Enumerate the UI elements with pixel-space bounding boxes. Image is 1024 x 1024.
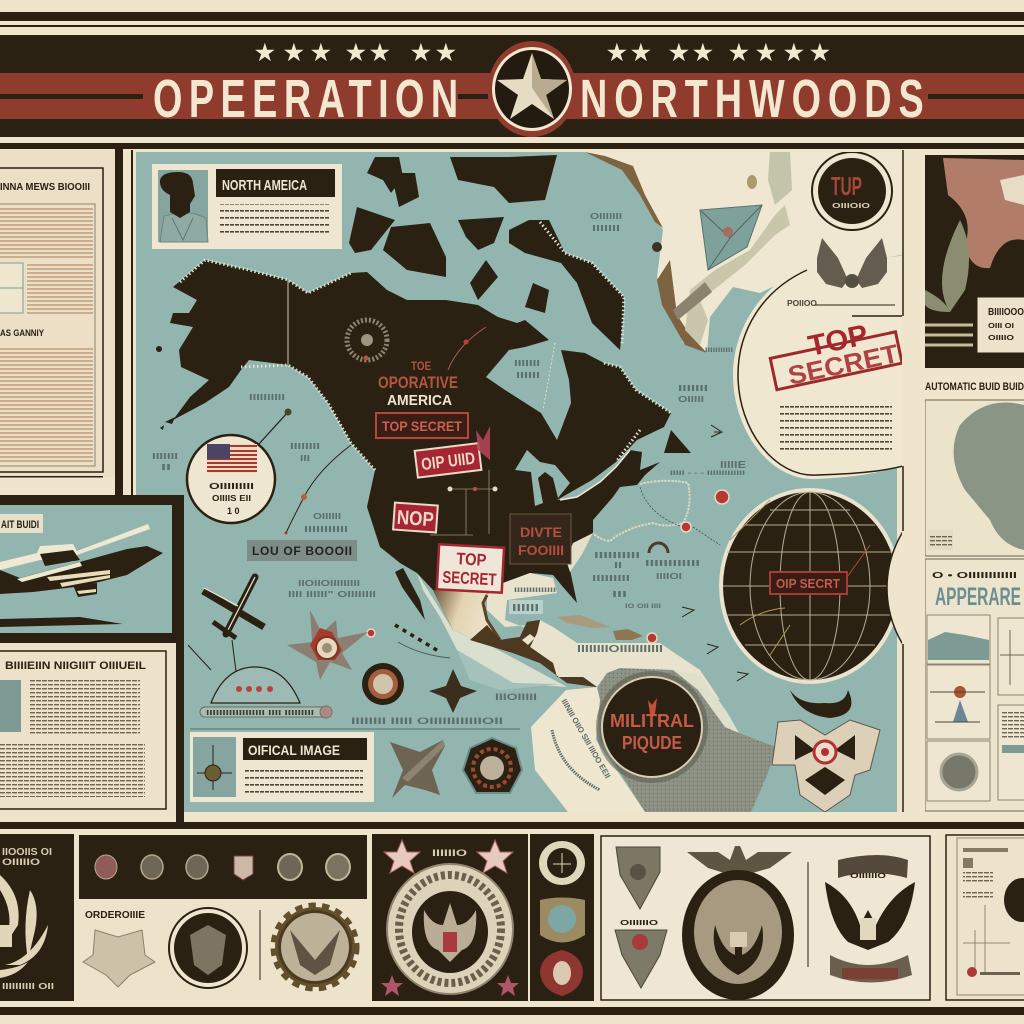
sea labels: OIIIIIII [590,212,622,221]
sea labels: IIIIIII [592,224,620,233]
horizontal rule below main [0,822,1024,829]
cream inset bubble [531,687,645,812]
icon: top seal [812,152,892,230]
panel: plane left [0,495,184,643]
dark right rail [176,495,184,823]
panel: bottom-left dossier: BIIIIEIIN NIIGIIIT OIIIUEIL [5,660,146,672]
stamp c: NOP [396,507,435,531]
top secret stamp a: TOP SECRET [382,418,462,434]
stamp: top secret large: SECRET [785,338,901,391]
sea labels: III [300,454,310,463]
bottom: right document [946,835,1024,1000]
stars row: ★ [669,40,689,65]
gray label: LOU OF BOOOII [252,544,352,558]
caribbean halftone band [530,620,720,700]
sea labels: IIII IIIIII" OIIIIIIII [288,590,376,599]
sea labels: II [161,463,171,472]
shield lower [615,920,667,988]
icon: top seal: TUP [831,171,862,201]
stars row: ★ [411,40,431,65]
small table [0,263,23,313]
sea labels: IIIIIII [514,359,540,368]
stars row: ★ [436,40,456,65]
globe label: OIP SECRT [776,576,840,591]
stars row: ★ [784,40,804,65]
stars row: ★ [756,40,776,65]
sea labels: IIIIIIIIIIII [645,559,700,568]
panel: bottom-left dossier [0,643,176,816]
card: official image [190,732,374,802]
stars row [255,40,830,65]
sea labels: IIIIIIIIII [594,551,640,560]
route line [284,445,351,534]
stars row: ★ [284,40,304,65]
stamp b [415,443,481,478]
panel: map [136,152,902,812]
title word right: NORTHWOODS [580,68,924,129]
appearance panel: O • OIIIIIIIIIIII [932,571,1017,580]
map right rule [902,150,904,812]
hispaniola [613,629,643,640]
red arc [448,327,486,370]
red target markers [367,490,729,643]
bottom: panel great seal [372,834,528,1001]
icon: kite envelope [700,205,762,270]
heading: INNA MEWS BIOOIII [0,182,90,193]
card: official image: OIFICAL IMAGE [248,742,340,758]
stars row: ★ [607,40,627,65]
small map [925,400,1024,556]
coast stipple [180,222,671,470]
sea labels: IIIIIII [152,452,178,461]
panel: right art [925,155,1024,811]
eagle right [825,855,915,982]
info card north america [152,164,342,249]
military plaque: MILITRAL [610,711,694,731]
sea labels: IIIIII [512,603,539,614]
stars row: ★ [255,40,275,65]
stamp dark box: FOOIIII [518,542,564,558]
St Lawrence shore [560,450,630,500]
baja [395,568,425,620]
bottom rule [0,1007,1024,1015]
cuba [557,615,610,628]
sea labels: IIIIIIIIIIIIII [514,588,557,594]
flag callout: OIIIIS EII [212,493,251,503]
shield lower: OIIIIIIO [620,920,659,927]
sea labels: IIIIII [516,371,540,380]
sea labels: IIIIIIIIII [249,393,285,402]
sea labels [152,212,746,726]
sea labels: IIIIIIIIIII [705,348,733,354]
stars row: ★ [729,40,749,65]
stamp: top secret large [766,313,903,394]
stamp: top secret large: TOP [805,319,871,363]
small rainbow icon [649,543,668,553]
panel: left dossier [0,150,115,478]
interior seal [347,320,387,360]
military plaque: PIQUDE [622,733,682,753]
bottom: panel eagles [601,836,930,1000]
flag callout: 1 0 [227,506,240,516]
dome diagram: IIIIIIIIIIIIIIIIII IIII IIIIIIIII [206,710,314,717]
sea labels: IIIIIE [720,460,746,471]
stars row: ★ [346,40,366,65]
dome diagram [188,645,332,718]
eagle right: OIIIIIIO [850,873,887,880]
greenland west coast [585,152,663,228]
sea labels: IIIIIIII [290,442,320,451]
small text rule [787,299,903,316]
sea labels: IIIIOI [656,572,682,581]
caribbean route [593,481,690,541]
panel: right art: OIII OI [988,323,1014,330]
sea labels: IIIIIIIIIII [304,525,348,534]
bubble text: IIINIII OIIO SIII IIIOO EEII [559,698,612,780]
mexico [433,590,500,647]
stars row: ★ [810,40,830,65]
sea labels: IIOIIOIIIIIIIII [298,579,360,588]
dark divider [115,148,123,498]
south america [596,668,776,812]
bottom: panel dark left: OIIIIIO [2,857,40,867]
stars row: ★ [631,40,651,65]
bottom: panel insignia row: ORDEROIIIE [85,910,145,921]
sea labels: II [614,561,622,570]
appearance panel [925,559,1024,811]
stars row: ★ [693,40,713,65]
pale patch [509,600,543,614]
central america [470,620,597,687]
military plaque [596,671,708,783]
flag [207,444,257,473]
bottom: panel dark left [0,834,74,1001]
greenland stipple [685,205,790,345]
shield upper [616,847,660,909]
icon: wings [817,238,887,288]
sea labels: IIIOIIIII [495,692,537,702]
stars row: ★ [370,40,390,65]
right cream margin [897,464,902,812]
sea labels: IIIIIIIII [592,574,630,583]
bottom: panel insignia row [75,835,372,1000]
paragraph under stamp [780,403,892,453]
flag callout: OIIIIIIIII [209,481,254,491]
header banner [0,12,1024,149]
leaf emblem [0,875,48,978]
cream north-east area [585,152,902,353]
bulge cream top secret [733,255,908,479]
arctic islands [349,155,691,453]
stamp b: OIP UIID [420,449,476,474]
oval badge [169,908,247,988]
top secret stamp a [376,413,468,438]
north america landmass [170,260,671,687]
star medallion [488,41,576,137]
sea labels: OIIIII [678,395,704,404]
arrows [682,425,748,681]
stamp dark box: DIVTE [520,524,562,540]
hex badge [463,738,522,793]
icon: top seal: OIIIOIO [832,203,871,210]
sea labels: IO OII IIII [625,604,661,610]
headline on map: AMERICA [387,392,452,409]
globe [719,480,1024,696]
star badge [83,930,155,987]
plane [0,524,163,597]
great lakes [515,450,570,506]
plane icon [203,577,264,703]
gear seal [275,907,355,987]
icon: missile [673,282,712,320]
stamp d top secret: SECRET [442,568,497,589]
small text rule: POIIOO [787,299,817,308]
globe notch [887,480,1024,696]
globe label [770,572,847,594]
row badges [95,854,350,880]
sea labels: IIIIIIIIOIIIIIIIIIII [577,644,663,655]
gray label [247,540,357,561]
compass star [287,610,368,680]
sea labels: IIIIIIII IIIII OIIIIIIIIIIIIOII [351,716,503,726]
stars row: ★ [311,40,331,65]
gulf coast halftone [487,573,557,627]
sea labels: IIIIIII [678,384,708,393]
Hudson dashed route [543,343,555,410]
seal [387,864,513,994]
flag callout [187,408,292,523]
diamond star [429,669,477,713]
bottom: panel great seal: IIIIIIO [432,848,467,858]
panel: plane left: AIT BUIDI [1,519,39,531]
mexico west strip [417,573,567,687]
sea labels: III [612,590,627,599]
headline on map [378,362,458,405]
stamp dark box [510,514,571,564]
info card north america: NORTH AMEICA [222,177,307,194]
bottom: panel dark left: IIOOIIS OI [2,847,52,858]
round badge [362,663,404,705]
winged emblem [772,690,880,812]
portrait [158,170,208,242]
headline on map: OPORATIVE [378,373,458,392]
title bar [216,169,335,197]
sea labels: OIIIIII [313,512,341,521]
alaska islets [156,346,175,430]
bottom: panel dark left: IIIIIIIIII OII [2,982,54,991]
panel: right art: OIIIIO [988,335,1015,342]
jet badge [390,740,445,798]
stamp d top secret [437,544,504,593]
big eagle seal [682,846,794,1000]
small island dots [395,625,440,652]
target crosshair [430,470,498,535]
sea labels: IIIII - - - IIIIIIIIIIIII [670,471,746,477]
title word left: OPEERATION [153,68,458,129]
stamp d top secret: TOP [456,549,487,570]
headline on map: TOE [411,359,431,373]
subheading: AS GANNIY [0,328,44,338]
bottom: badge column [530,834,594,1001]
